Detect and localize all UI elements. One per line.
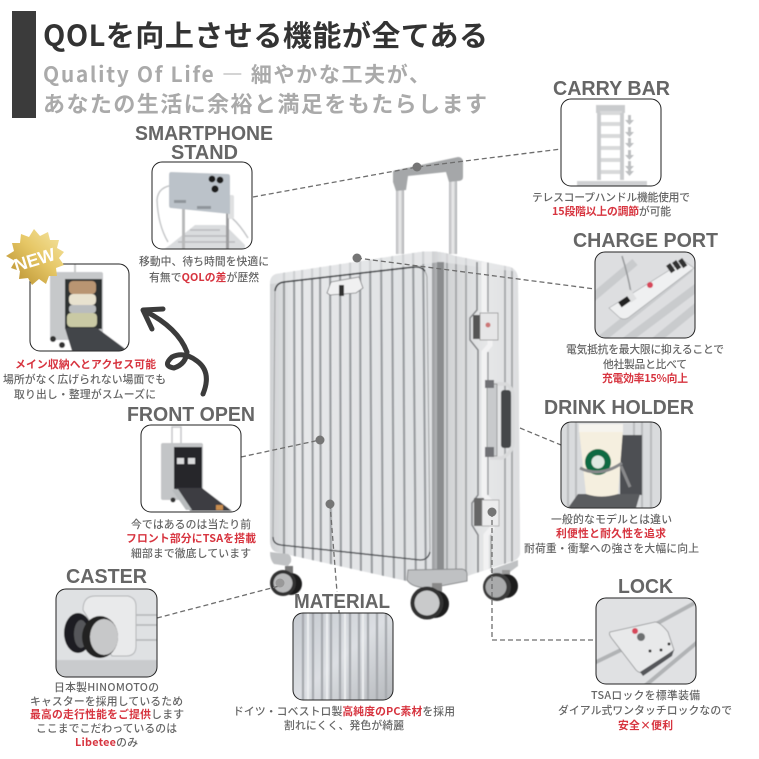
side carry handle bbox=[485, 380, 513, 458]
panel: caster bbox=[30, 566, 184, 750]
panel: carry bar: テレスコープハンドル機能使用で bbox=[532, 189, 690, 205]
panel: front open: FRONT OPEN bbox=[127, 404, 255, 426]
panel: lock: ダイアル式ワンタッチロックなので bbox=[558, 702, 732, 718]
panel: material: ドイツ・コベストロ製高純度のPC素材を採用 bbox=[233, 703, 455, 719]
panel: material bbox=[233, 591, 455, 733]
ribbed material swatch bbox=[293, 613, 393, 700]
corner bumpers bbox=[270, 552, 518, 588]
dashed leader lines bbox=[157, 149, 596, 640]
subtitle: Quality Of Life — 細やかな工夫が、 bbox=[43, 59, 430, 89]
panel: carry bar: 15段階以上の調節が可能 bbox=[552, 203, 671, 219]
panel: new main compartment access: 場所がなく広げられない場面でも bbox=[3, 371, 166, 387]
panel: smartphone stand: SMARTPHONE bbox=[135, 123, 273, 145]
front latch bbox=[327, 277, 363, 296]
panel: charge port: 充電効率15%向上 bbox=[602, 370, 688, 386]
panel: drink holder: 利便性と耐久性を追求 bbox=[556, 525, 666, 541]
panel: charge port: 電気抵抗を最大限に抑えることで bbox=[566, 341, 724, 357]
panel: front open bbox=[126, 404, 256, 561]
panel: drink holder: 耐荷重・衝撃への強さを大幅に向上 bbox=[524, 540, 699, 556]
panel: charge port: CHARGE PORT bbox=[573, 230, 718, 252]
panel: material: MATERIAL bbox=[294, 591, 390, 613]
panel: charge port: 他社製品と比べて bbox=[603, 356, 687, 372]
panel: drink holder: 一般的なモデルとは違い bbox=[551, 511, 672, 527]
panel: drink holder bbox=[524, 397, 699, 556]
front door outline bbox=[273, 267, 430, 560]
telescopic handle bbox=[393, 157, 463, 254]
wheels bbox=[270, 566, 518, 620]
subtitle bbox=[43, 59, 487, 119]
subtitle: あなたの生活に余裕と満足をもたらします bbox=[43, 87, 487, 119]
panel: material: 割れにくく、発色が綺麗 bbox=[284, 717, 404, 733]
panel: charge port bbox=[566, 230, 724, 386]
lower side lock bbox=[474, 498, 499, 526]
panel: caster: CASTER bbox=[66, 566, 148, 588]
arrow: curly hand-drawn bbox=[143, 309, 206, 394]
panel: caster: Libeteeのみ bbox=[75, 734, 138, 750]
panel: smartphone stand: 移動中、待ち時間を快適に bbox=[139, 253, 269, 269]
panel: smartphone stand: STAND bbox=[171, 142, 238, 164]
suitcase shell bbox=[270, 251, 520, 582]
panel: lock: TSAロックを標準装備 bbox=[591, 687, 700, 703]
smartphone photo bbox=[156, 172, 249, 248]
panel: carry bar bbox=[532, 78, 690, 219]
panel: new main compartment access bbox=[3, 229, 166, 402]
open suitcase photo bbox=[49, 264, 125, 350]
panel: caster: キャスターを採用しているため bbox=[30, 693, 183, 709]
header bar bbox=[12, 11, 36, 118]
panel: caster: ここまでこだわっているのは bbox=[36, 720, 177, 736]
caster photo bbox=[56, 589, 157, 677]
panel: lock: LOCK bbox=[618, 576, 674, 598]
telescopic handle diagram bbox=[576, 104, 648, 186]
title: QOLを向上させる機能が全てある bbox=[43, 13, 488, 55]
panel: caster: 日本製HINOMOTOの bbox=[54, 679, 159, 695]
callout dots bbox=[276, 162, 496, 588]
panel: front open: 今ではあるのは当たり前 bbox=[131, 516, 251, 532]
icon: NEW gold burst badge: NEW bbox=[12, 244, 58, 276]
panel: front open: フロント部分にTSAを搭載 bbox=[126, 530, 256, 546]
icon: NEW gold burst badge bbox=[6, 229, 64, 285]
panel: smartphone stand: 有無でQOLの差が歴然 bbox=[149, 269, 259, 285]
open front suitcase photo bbox=[160, 426, 232, 512]
panel: lock: 安全×便利 bbox=[618, 717, 673, 733]
panel: caster: 最高の走行性能をご提供します bbox=[30, 706, 184, 722]
upper side lock bbox=[473, 313, 498, 340]
charge port photo bbox=[596, 252, 694, 338]
panel: smartphone stand bbox=[135, 123, 273, 285]
panel: carry bar: CARRY BAR bbox=[553, 78, 671, 100]
panel: new main compartment access: 取り出し・整理がスムーズに bbox=[14, 386, 156, 402]
TSA lock photo bbox=[596, 598, 696, 684]
panel: lock bbox=[558, 576, 732, 733]
panel: new main compartment access: メイン収納へとアクセス可能 bbox=[15, 356, 156, 372]
panel: front open: 細部まで徹底しています bbox=[131, 545, 251, 561]
drink holder photo bbox=[561, 422, 661, 508]
suitcase bbox=[265, 157, 524, 620]
panel: drink holder: DRINK HOLDER bbox=[544, 397, 695, 419]
